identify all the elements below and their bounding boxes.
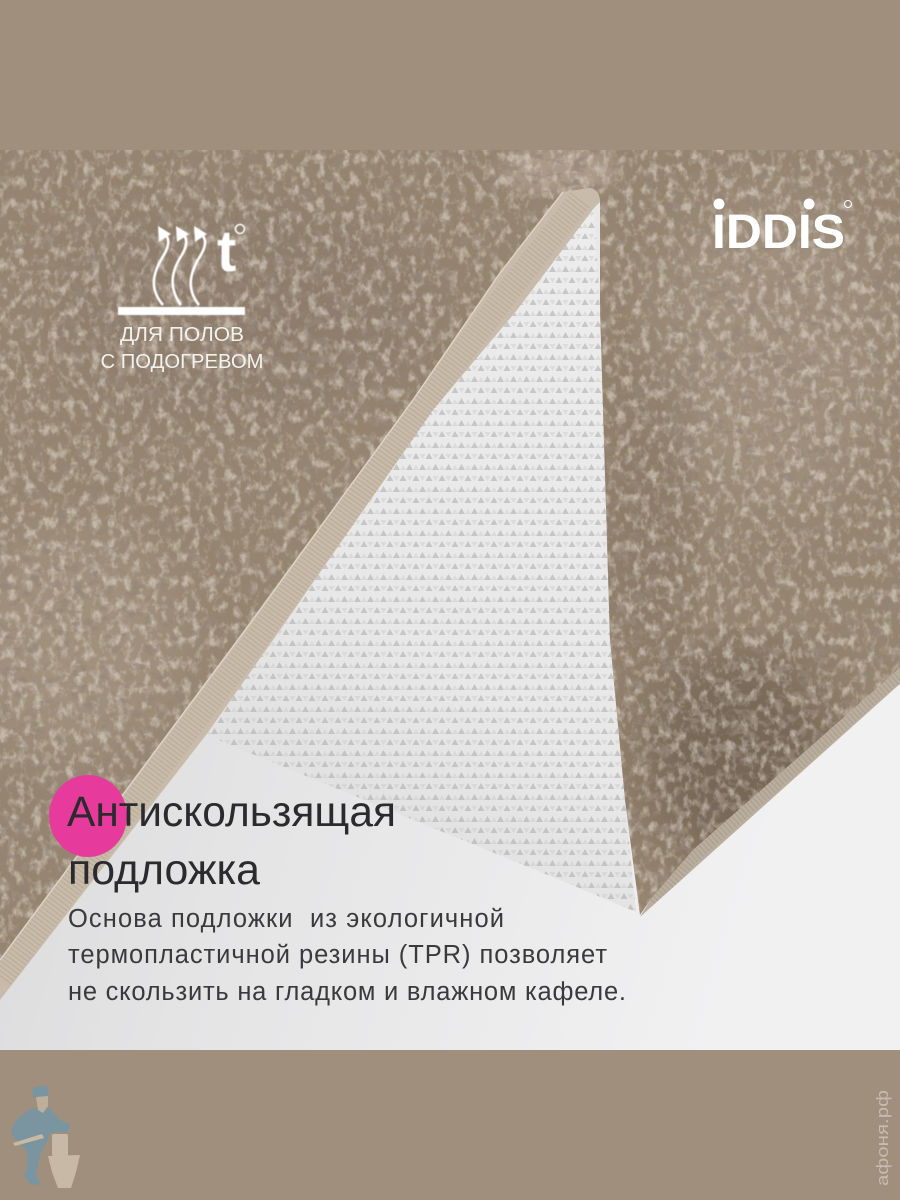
body text: [68, 905, 626, 1006]
pink accent circle: [49, 775, 127, 857]
heading: Антискользящая: [67, 788, 396, 836]
photo: floor background: [0, 150, 900, 1050]
icon: floor line: [118, 307, 245, 315]
watermark: plumber with toilet: [11, 1085, 80, 1188]
plumber face: [36, 1096, 48, 1113]
photo: rug binding along the fold: [0, 188, 600, 1000]
body text: термопластичной резины (TPR) позволяет: [68, 941, 607, 969]
label: heated floors: [100, 324, 264, 373]
photo: rug binding, lower right edge: [640, 668, 900, 917]
heading: подложка: [68, 846, 260, 894]
photo: white rubber backing triangle: [206, 208, 636, 912]
top band: [0, 0, 900, 150]
body text: Основа подложки из экологичной: [68, 905, 504, 933]
wrench: [13, 1134, 44, 1146]
label: heated floors: С ПОДОГРЕВОМ: [100, 351, 264, 373]
icon: heated floor: [118, 219, 245, 315]
icon: temperature symbol: t: [217, 219, 236, 284]
photo: beige rug pile: [0, 146, 900, 980]
icon: heat arrows: [154, 226, 207, 305]
bottom band: [0, 1050, 900, 1200]
toilet: [48, 1134, 80, 1188]
logo: IDDIS: IDDIS: [712, 206, 845, 259]
watermark: site name: афоня.рф: [873, 1090, 892, 1186]
heading: [67, 788, 396, 894]
label: heated floors: ДЛЯ ПОЛОВ: [120, 324, 244, 346]
plumber figure: [11, 1085, 70, 1185]
icon: degree mark: [236, 224, 244, 234]
body text: не скользить на гладком и влажном кафеле.: [68, 978, 626, 1006]
